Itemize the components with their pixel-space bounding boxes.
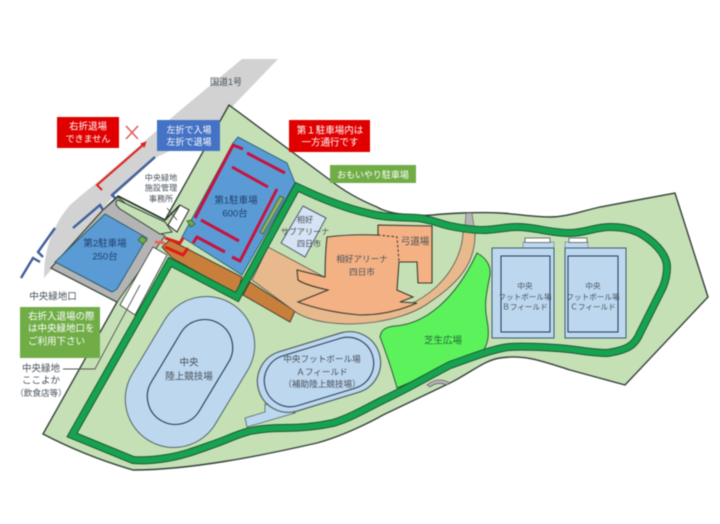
label: sub arena: サブアリーナ <box>281 226 329 236</box>
field A inner line <box>258 331 380 413</box>
callout: right-turn entry note: ご利用下さい <box>28 336 85 348</box>
label: field A: Ａフィールド <box>296 367 348 377</box>
label: lot 1: 600台 <box>222 208 248 220</box>
callout: one way in lot 1: 一方通行です <box>301 136 359 148</box>
football field B <box>492 238 554 338</box>
gray connector top <box>465 213 474 227</box>
label: stadium: 中央 <box>179 356 199 368</box>
callout: left turn in and out: 左折で入場 <box>166 124 212 135</box>
central green entrance label: 中央緑地口 <box>29 290 77 302</box>
one-way lane markers <box>193 145 285 261</box>
label: sub arena: 相好 <box>297 214 313 224</box>
leader line: Kokoyoka <box>63 285 140 369</box>
office label: 中央緑地 <box>145 172 177 182</box>
gray connector bottom <box>427 380 450 387</box>
label: field C: フットボール場 <box>566 292 620 302</box>
office building <box>168 205 189 232</box>
main arena and archery hall <box>297 225 432 315</box>
callout: right-turn entry note <box>20 307 100 358</box>
track inner line <box>137 309 243 435</box>
callout: left turn in and out <box>157 120 220 151</box>
label: lawn: 芝生広場 <box>424 334 462 346</box>
label: lot 2 <box>83 238 127 262</box>
label: field B: フットボール場 <box>498 292 552 302</box>
road: national route 1 <box>44 59 278 278</box>
office leader line <box>167 208 177 220</box>
callout: left turn in and out: 左折で退場 <box>166 136 212 147</box>
football field C <box>565 238 626 338</box>
label: field A: （補助陸上競技場） <box>283 378 361 389</box>
callout: right turn not allowed <box>57 117 119 148</box>
outline of entrance road <box>118 196 180 220</box>
field B pitch <box>501 256 550 332</box>
label: field A <box>283 353 361 389</box>
label: lot 2: 250台 <box>92 250 118 262</box>
athletics stadium <box>107 278 273 466</box>
red arrow: right-turn exit prohibited <box>97 143 145 190</box>
label: stadium: 陸上競技場 <box>165 370 213 382</box>
label: field A: 中央フットボール場 <box>283 353 361 364</box>
road label: 国道1号 <box>210 76 242 87</box>
Kokoyoka label: （飲食店等） <box>15 387 67 398</box>
callout: one way in lot 1 <box>289 120 370 152</box>
park grounds <box>43 105 708 470</box>
label: field B: 中央 <box>517 280 533 290</box>
considerate parking strip <box>260 196 284 234</box>
brown road extension <box>243 282 295 322</box>
entrance red arrows <box>155 238 188 255</box>
office label <box>145 172 177 204</box>
label: field B: Ｂフィールド <box>502 302 548 312</box>
office label: 事務所 <box>149 194 173 204</box>
label: stadium <box>165 356 213 382</box>
label: lot 1 <box>214 194 258 220</box>
parking lot 2 surround <box>51 197 165 302</box>
label: field C: 中央 <box>585 280 601 290</box>
tan arena plaza <box>252 232 475 324</box>
icon: prohibited cross <box>126 126 138 139</box>
parking lot 2 <box>55 214 147 292</box>
label: lot 2: 第2駐車場 <box>83 238 127 250</box>
label: field C: Ｃフィールド <box>570 302 616 312</box>
parking lot 1 <box>182 137 295 275</box>
brown access road <box>162 240 242 294</box>
callout: right turn not allowed: 右折退場 <box>69 120 107 132</box>
sub arena <box>281 206 329 257</box>
office label: 施設管理 <box>145 182 177 192</box>
lawn plaza <box>380 253 490 388</box>
label: archery hall: 弓道場 <box>401 236 430 248</box>
field C pitch <box>568 256 618 332</box>
icon: lot 2 accessible area <box>138 236 147 244</box>
label: sub arena: 四日市 <box>297 238 321 248</box>
Kokoyoka label: ここよか <box>22 376 60 386</box>
dashed partition <box>378 235 399 262</box>
label: field C <box>566 280 620 312</box>
label: arena: 相好アリーナ <box>336 253 388 264</box>
label: field B <box>498 280 552 312</box>
label: sub arena <box>281 214 329 248</box>
callout: right-turn entry note: は中央緑地口を <box>28 322 95 334</box>
callout: right-turn entry note: 右折入退場の際 <box>28 310 95 322</box>
label: lot 1: 第1駐車場 <box>214 194 258 206</box>
callout: right turn not allowed: できません <box>66 134 110 144</box>
label: arena: 四日市 <box>349 266 375 277</box>
blue arrows: entry and exit <box>21 157 155 278</box>
callout: one way in lot 1: 第１駐車場内は <box>297 124 364 136</box>
walking course outline <box>72 187 667 460</box>
walking course <box>72 187 667 460</box>
callout: considerate parking: おもいやり駐車場 <box>337 169 409 180</box>
Kokoyoka label: 中央緑地 <box>22 362 60 374</box>
Kokoyoka label <box>15 362 67 398</box>
icon: office small marker <box>187 220 195 227</box>
callout: considerate parking <box>330 165 416 183</box>
central green entrance white strip <box>120 247 167 315</box>
label: arena <box>336 253 388 277</box>
green strip beside office <box>116 200 172 234</box>
football field A <box>245 324 388 427</box>
